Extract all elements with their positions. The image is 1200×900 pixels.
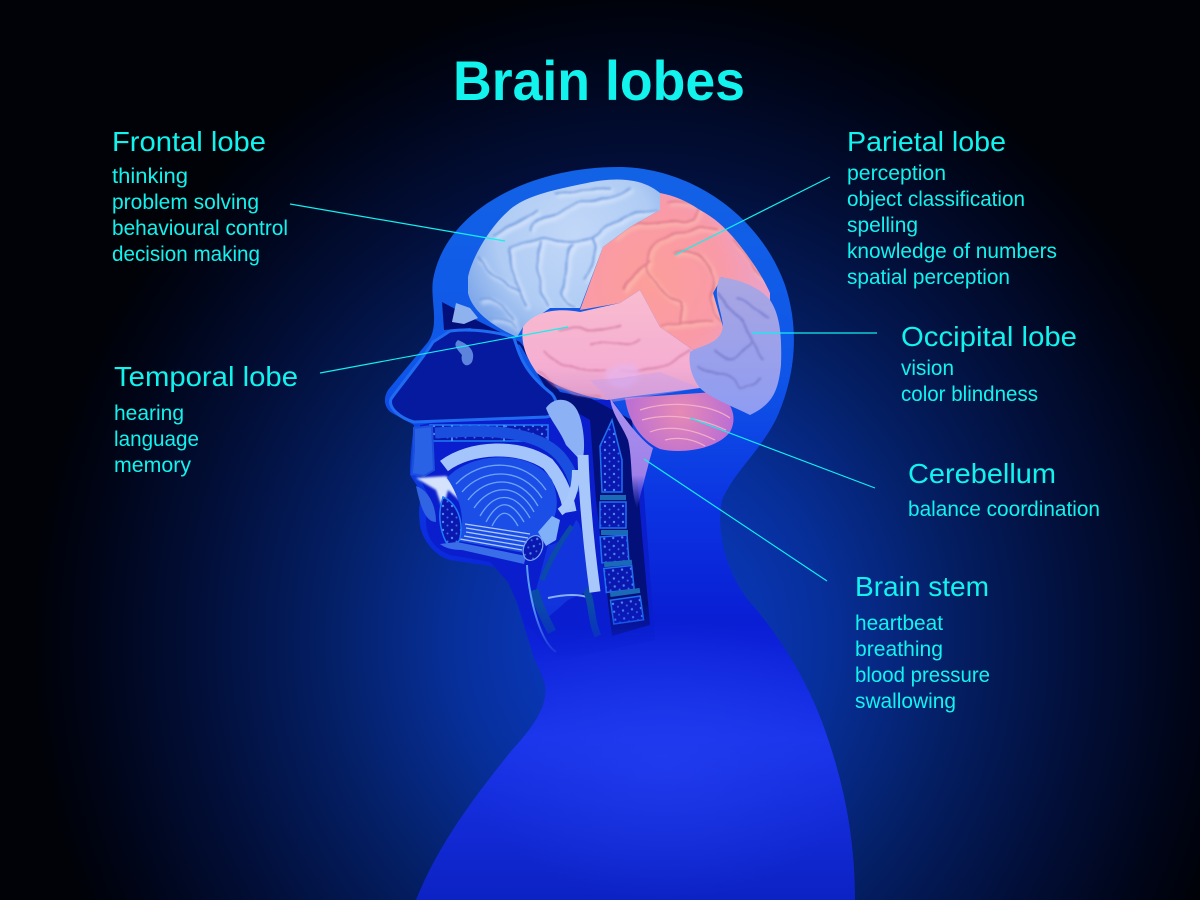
shoulder highlight <box>610 756 721 840</box>
label: brain stem: blood pressure <box>855 664 990 687</box>
dark band under brain and spine head <box>442 302 650 636</box>
parietal lobe <box>580 193 770 350</box>
label: cerebellum: Cerebellum <box>908 458 1056 489</box>
label: frontal lobe: decision making <box>112 243 260 266</box>
label: temporal lobe: memory <box>114 454 192 477</box>
temporal lobe <box>522 290 700 402</box>
label: brain stem: Brain stem <box>855 571 989 602</box>
brain stem <box>610 398 653 508</box>
label: cerebellum <box>908 458 1100 521</box>
label: frontal lobe: behavioural control <box>112 217 288 240</box>
hard palate pale band <box>444 450 570 512</box>
human head and shoulders silhouette <box>385 167 865 900</box>
label: temporal lobe <box>114 361 298 477</box>
epiglottis <box>538 516 560 546</box>
frontal sinus <box>452 303 478 324</box>
label: parietal lobe <box>847 126 1057 289</box>
label: parietal lobe: spatial perception <box>847 266 1010 289</box>
label: occipital lobe <box>901 321 1077 406</box>
occipital lobe <box>689 277 781 415</box>
tongue <box>447 457 557 553</box>
palate bone row <box>430 425 548 441</box>
label: temporal lobe: hearing <box>114 402 184 425</box>
label: cerebellum: balance coordination <box>908 498 1100 521</box>
label: temporal lobe: Temporal lobe <box>114 361 298 392</box>
label: occipital lobe: vision <box>901 357 954 380</box>
throat base <box>418 400 652 605</box>
label: brain stem: swallowing <box>855 690 956 713</box>
label: occipital lobe: Occipital lobe <box>901 321 1077 352</box>
hyoid <box>522 535 544 561</box>
label: frontal lobe: thinking <box>112 165 188 188</box>
airway outline <box>527 565 556 652</box>
title: Brain lobes <box>453 49 745 112</box>
brainstem column and vertebrae <box>600 420 644 624</box>
label: parietal lobe: object classification <box>847 188 1025 211</box>
label: brain stem: heartbeat <box>855 612 943 635</box>
face cross-section: nasal cavity, mouth and throat <box>391 302 655 660</box>
label: brain stem <box>855 571 990 713</box>
label: frontal lobe: problem solving <box>112 191 259 214</box>
label: frontal lobe: Frontal lobe <box>112 126 266 157</box>
jaw muscle <box>440 542 526 564</box>
label: brain stem: breathing <box>855 638 943 661</box>
chin bone <box>440 497 461 545</box>
soft palate <box>435 431 575 487</box>
label: parietal lobe: spelling <box>847 214 918 237</box>
cerebellum <box>625 392 734 451</box>
label: parietal lobe: perception <box>847 162 946 185</box>
intervertebral discs <box>600 495 640 597</box>
adenoid <box>546 400 584 462</box>
label: occipital lobe: color blindness <box>901 383 1038 406</box>
eye socket highlight <box>455 340 473 365</box>
label: parietal lobe: Parietal lobe <box>847 126 1006 157</box>
label: parietal lobe: knowledge of numbers <box>847 240 1057 263</box>
callout lines <box>290 177 877 581</box>
front lip and teeth <box>412 426 434 476</box>
pharynx pale band <box>583 455 595 592</box>
label: frontal lobe <box>112 126 288 266</box>
sinus cavity <box>391 330 556 422</box>
label: temporal lobe: language <box>114 428 199 451</box>
frontal lobe <box>468 179 660 337</box>
brain <box>468 179 781 508</box>
